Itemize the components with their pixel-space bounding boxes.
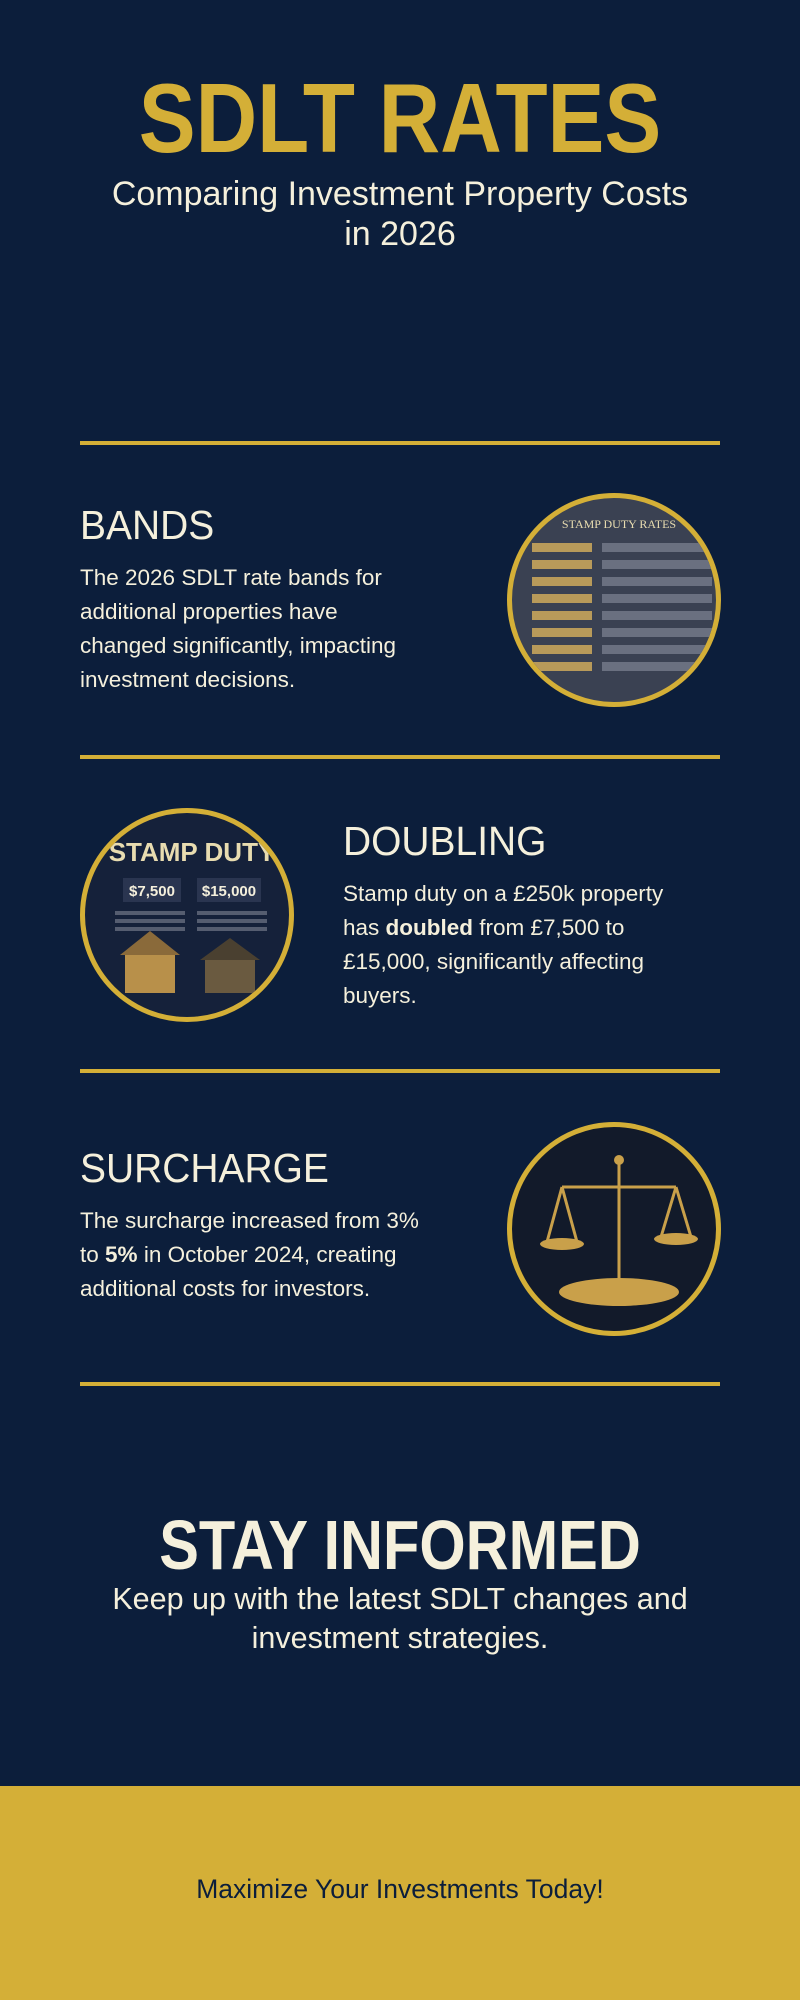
- panel: bands: [80, 493, 721, 707]
- icon: stamp duty image: $15,000: [202, 883, 256, 900]
- panel: doubling: [80, 808, 664, 1022]
- subtitle: in 2026: [344, 215, 456, 253]
- text: stay informed: [112, 1582, 688, 1655]
- text: surcharge: The surcharge increased from 3% to 5% in October 2024, creating additional costs for investors.: [80, 1208, 419, 1301]
- icon: stamp duty image: STAMP DUTY: [109, 837, 275, 867]
- panel: surcharge: [80, 1122, 721, 1336]
- subtitle: Comparing Investment Property Costs: [112, 175, 688, 213]
- heading: stay informed: STAY INFORMED: [159, 1506, 641, 1584]
- heading: surcharge: SURCHARGE: [80, 1145, 329, 1191]
- icon: scales image: [507, 1122, 721, 1336]
- icon: stamp duty image: $7,500: [129, 883, 175, 900]
- title: SDLT RATES: [139, 63, 661, 173]
- text: doubling: Stamp duty on a £250k property has doubled from £7,500 to £15,000, significantly affecting buyers.: [343, 881, 663, 1008]
- footer band: [0, 1786, 800, 2000]
- text: stay informed: Keep up with the latest SDLT changes and: [112, 1582, 688, 1616]
- icon: stamp duty image: [80, 808, 294, 1022]
- heading: doubling: DOUBLING: [343, 818, 546, 864]
- icon: rate table image: STAMP DUTY RATES: [562, 517, 676, 531]
- icon: rate table image: [507, 493, 721, 707]
- text: stay informed: investment strategies.: [252, 1621, 548, 1655]
- heading: bands: BANDS: [80, 502, 214, 548]
- text: bands: The 2026 SDLT rate bands for additional properties have changed significantly, impacting investment decisions.: [80, 565, 396, 692]
- footer text: Maximize Your Investments Today!: [196, 1874, 604, 1904]
- subtitle: [112, 175, 688, 253]
